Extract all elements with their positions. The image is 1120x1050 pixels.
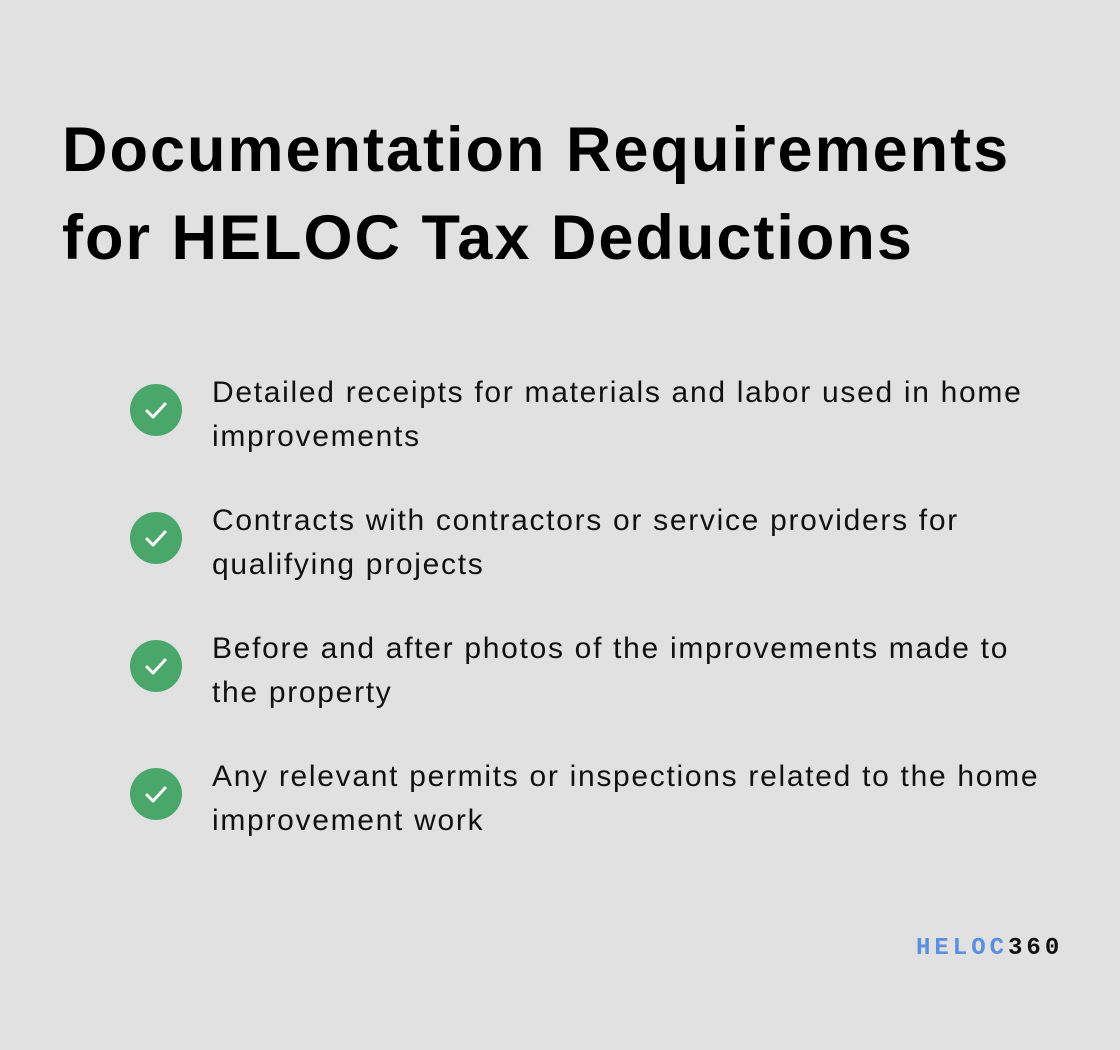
text: improvement work [212,804,484,837]
text [212,632,1009,709]
item: photos [130,632,1009,709]
item: permits [130,760,1039,837]
text: qualifying projects [212,548,484,581]
text: improvements [212,420,421,453]
icon: check [130,640,182,692]
icon: check [130,384,182,436]
title: Documentation Requirements [62,115,1010,185]
text [212,760,1039,837]
text: the property [212,676,392,709]
title: for HELOC Tax Deductions [62,203,914,273]
item: contracts [130,504,959,581]
item: receipts [130,376,1023,453]
text [212,504,959,581]
title [62,115,1010,273]
text: Detailed receipts for materials and labor used in home [212,376,1023,409]
logo: HELOC360 [916,935,1063,962]
text: Before and after photos of the improvements made to [212,632,1009,665]
icon: check [130,512,182,564]
text [212,376,1023,453]
icon: check [130,768,182,820]
text: Any relevant permits or inspections related to the home [212,760,1039,793]
text: Contracts with contractors or service providers for [212,504,959,537]
